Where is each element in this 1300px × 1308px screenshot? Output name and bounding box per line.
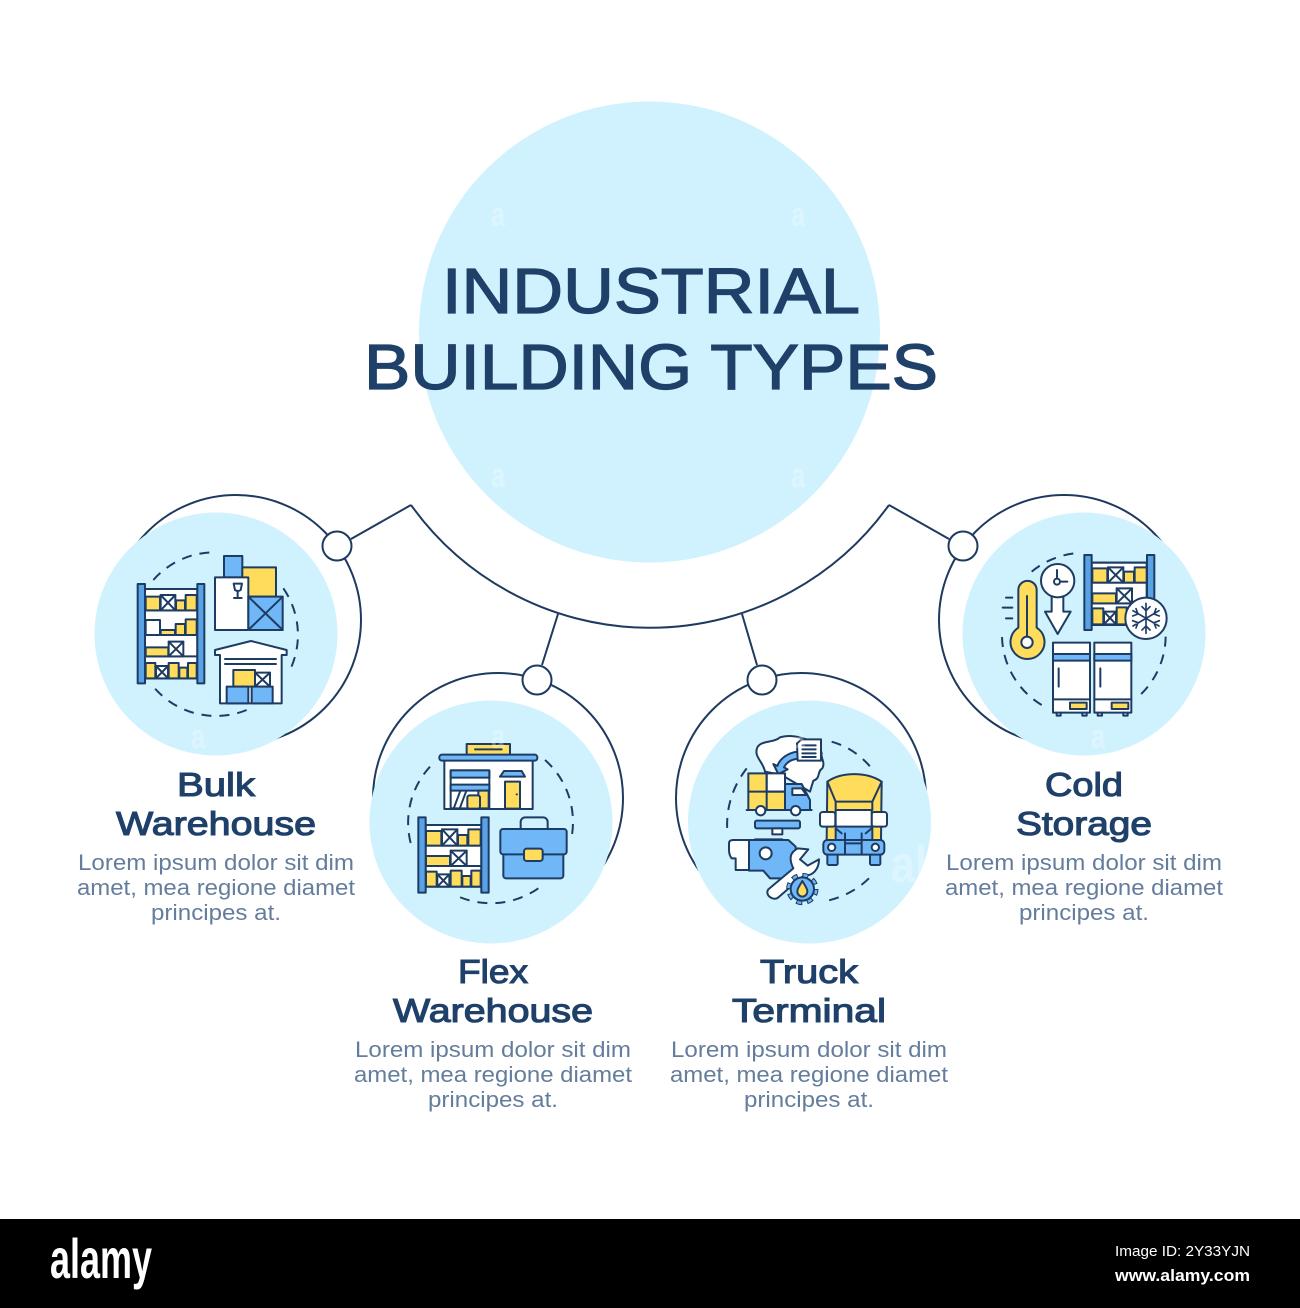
text: truck description: Lorem ipsum dolor sit dim (671, 1037, 947, 1062)
text: flex description: amet, mea regione diamet (354, 1062, 632, 1087)
panel: flex warehouse (354, 666, 632, 1112)
watermark marks: al (891, 836, 927, 894)
connector node: bulk (322, 532, 352, 560)
title: INDUSTRIAL (442, 255, 860, 327)
footer bar (0, 1219, 1300, 1308)
heading: bulk warehouse: Warehouse (116, 805, 316, 842)
watermark marks: a (791, 196, 806, 234)
heading: flex warehouse: Flex (458, 953, 529, 990)
footer url: www.alamy.com (1114, 1266, 1250, 1285)
text: bulk description: Lorem ipsum dolor sit dim (78, 850, 354, 875)
panel: bulk warehouse (77, 495, 361, 925)
text: flex description: Lorem ipsum dolor sit dim (355, 1037, 631, 1062)
watermark marks: a (791, 457, 806, 495)
text: cold description (945, 850, 1223, 925)
text: truck description: amet, mea regione diamet (670, 1062, 948, 1087)
title: BUILDING TYPES (364, 331, 938, 403)
connector arc and branches (351, 505, 949, 665)
text: flex description: principes at. (428, 1087, 558, 1112)
panel: truck terminal (670, 666, 948, 1112)
central circle (419, 102, 880, 562)
title (364, 255, 938, 403)
heading: truck terminal: Truck (760, 953, 859, 990)
heading: bulk warehouse: Bulk (177, 766, 256, 803)
text: truck description: principes at. (744, 1087, 874, 1112)
watermark marks (191, 196, 1106, 894)
text: cold description: principes at. (1019, 900, 1149, 925)
connector node: flex (522, 666, 552, 694)
watermark marks: a (191, 718, 206, 756)
connector node: truck (748, 666, 776, 694)
icon: flex building, shelves and briefcase (408, 744, 573, 903)
icon: trucks, engine and document (727, 736, 887, 903)
watermark marks: a (1091, 718, 1106, 756)
heading: flex warehouse: Warehouse (393, 992, 593, 1029)
text: cold description: Lorem ipsum dolor sit dim (946, 850, 1222, 875)
connector node: cold (948, 532, 978, 560)
text: bulk description (77, 850, 355, 925)
icon: shelves, boxes and warehouse (138, 552, 298, 716)
panel: cold storage (939, 495, 1223, 925)
watermark marks: a (491, 718, 506, 756)
heading: flex warehouse (393, 953, 593, 1029)
watermark marks: a (491, 457, 506, 495)
watermark marks: a (491, 196, 506, 234)
heading: bulk warehouse (116, 766, 316, 842)
heading: truck terminal: Terminal (732, 992, 886, 1029)
footer logo: alamy (50, 1227, 152, 1290)
icon: thermometer, clock, shelves, snowflake and freezers (1002, 553, 1167, 716)
heading: cold storage: Cold (1045, 766, 1123, 803)
text: bulk description: amet, mea regione diamet (77, 875, 355, 900)
text: truck description (670, 1037, 948, 1112)
heading: cold storage (1016, 766, 1152, 842)
text: bulk description: principes at. (151, 900, 281, 925)
text: flex description (354, 1037, 632, 1112)
text: cold description: amet, mea regione diamet (945, 875, 1223, 900)
footer image id: Image ID: 2Y33YJN (1115, 1243, 1250, 1260)
heading: truck terminal (732, 953, 886, 1029)
heading: cold storage: Storage (1016, 805, 1152, 842)
watermark marks: a (791, 718, 806, 756)
